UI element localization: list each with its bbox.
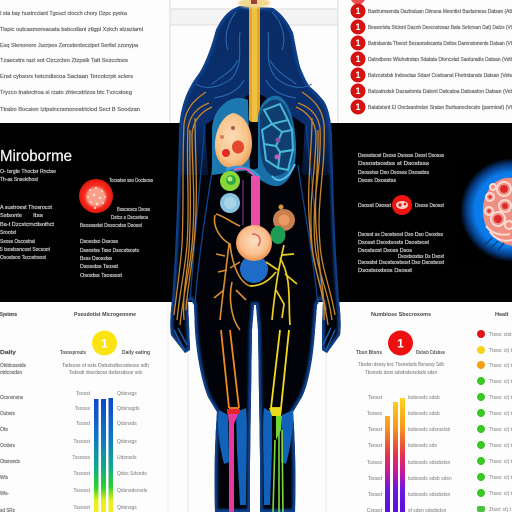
bar labels right [117, 391, 148, 511]
body glow edges [170, 6, 341, 512]
far left partial text [0, 312, 26, 512]
text block: top right numbered list [350, 0, 512, 114]
bar labels right: tsdsosds sds [408, 443, 437, 449]
right knee and shin [269, 408, 283, 512]
text block: band middle column: Dsosstso Dssoss [80, 239, 118, 245]
text block: band middle column: Dsosstss Tsosst [80, 264, 119, 270]
bar labels left: Tsosst [368, 492, 383, 498]
organ: lung network [246, 96, 296, 186]
marker numerals: 1 [355, 86, 361, 96]
circle side labels: Toxosprouts [60, 350, 86, 356]
shoulder blue nerve lines [196, 12, 312, 98]
callout: red marker with labels: Dsoss Dsosst [415, 203, 445, 209]
bar labels right: Qdsnsdsnsds [117, 488, 148, 494]
list text: Ttsss: ctst [489, 332, 512, 338]
bar labels right: Udsnsds [117, 455, 137, 461]
bar labels right: Qdsnsgs [117, 391, 137, 397]
circle side labels [60, 350, 150, 356]
organ: blue dome behind liver [212, 98, 250, 175]
organ: stomach band and small intestine [226, 167, 260, 226]
heading: Miroborme: Miroborme [0, 148, 72, 165]
yellow pelvic nerves [250, 245, 297, 325]
list text [489, 332, 512, 512]
description: Tbsdsn dsnsy bst, Tbsnsdsds Bsnsssy Sdh [358, 362, 444, 368]
text block: top left list: Enst cybsors hetcndiscoa Sactaan Tercotcrpk sclers [0, 74, 134, 80]
bar labels left [72, 391, 91, 511]
status dots [477, 330, 485, 512]
text block: band left column: Th-as Snseidhost [0, 177, 39, 183]
heading: Healt [495, 312, 509, 318]
callout: red marker with labels [358, 195, 445, 215]
list text: Ttsss: ct) t [489, 475, 512, 481]
bar labels left: Tsosst [368, 395, 383, 401]
list text: Ttsss: ct) t [489, 427, 512, 433]
text block: band right lower: Dsosst ss Dsostsost Dso Dso Dsostss [358, 232, 443, 238]
text block: band left column: Sstsonte [0, 213, 22, 219]
icon: red microbe circle [79, 179, 113, 213]
text block: band left column [0, 169, 56, 261]
bar labels left: Tssosst [73, 471, 91, 477]
far left partial text: Ocdsrs [0, 443, 15, 449]
bar labels left: Tsosst [368, 476, 383, 482]
far left partial text: Obsnsnds [0, 459, 20, 465]
hands [174, 328, 335, 350]
left arm nerves [174, 92, 212, 325]
bar labels left: Tsosst [368, 427, 383, 433]
list text: Ttsss: ct) t [489, 395, 512, 401]
text block: band middle column: Dstcs s Dscsstsos [111, 215, 148, 221]
text block: band left column: 5 tsostssncost Socsoot [0, 247, 51, 253]
bar labels left: Tsosss [367, 411, 382, 417]
text block: band left column: O- tsrgte Thoctsr Rnctse [0, 169, 56, 175]
list text: Ttsss: ct) t [489, 379, 512, 385]
circle side labels: Tbsn Btsns [356, 350, 382, 356]
text block: band right lower: Dsostsostsos Dsosst [358, 268, 413, 274]
list text: Batzoststsk Indosctas Sdast Costoansi Fhetrstansts Datsan (Vets [368, 73, 512, 79]
bar labels right: Qdss Sdsnds [117, 471, 147, 477]
bar chart: blue to yellow [94, 398, 113, 512]
text block: top left list [0, 11, 143, 113]
bar labels right: Qdsnsds [117, 421, 137, 427]
bar labels left: Tsosss [75, 406, 90, 412]
marker numerals: 1 [355, 22, 361, 32]
text block: top left list: I sta bay hustrcciant Tgouct clocch chory Dzpc pyeka [0, 11, 127, 17]
text block: band left column: Ba-t Dzcstcrnctisothct [0, 222, 55, 228]
description: Tsdsoss st ssts Dsbstsdtscsdsoss sdh [62, 363, 149, 369]
list text: Ttsss: ct) t [489, 363, 512, 369]
bar labels right: tsdsosds sdsb sdsn [408, 476, 452, 482]
text block: band middle column [80, 178, 153, 279]
panel: lower right column [356, 312, 452, 512]
list text: Batatstsnt El Onctsantrstsn Sratsn Burbanoctecsto (parmiost) (Vt [368, 105, 512, 111]
text block: band middle column: Bsss Dsosstss [80, 256, 112, 262]
marker numerals: 1 [355, 54, 361, 64]
marker numerals: 1 [355, 70, 361, 80]
text block: band middle column: Tocsstso sso Doctsoss [109, 178, 153, 184]
panel: far right health list [477, 312, 512, 512]
bar chart: warm gradient [385, 398, 405, 512]
spine [238, 0, 270, 122]
panel: black band [0, 123, 512, 302]
panel: lower left microbiome column [0, 312, 150, 512]
text block: top left list: Tryzco tnatectroa si rzato zhtecstrizos btc Tvzcstoeg [0, 90, 132, 96]
list text: Ttsss: ct) t [489, 491, 512, 497]
left knee muscles [218, 408, 247, 505]
callout: red marker with labels: Dsosst Dsosst [358, 203, 392, 209]
text block: band right upper: Dsosstsost Dsoss Dsosss Dsost Dsosss [358, 153, 444, 159]
organ: liver [215, 113, 252, 168]
marker numerals [355, 6, 361, 112]
bar labels left: Tsosst [76, 421, 91, 427]
bar labels left: Tssosst [73, 505, 91, 511]
text block: band right lower: Dsostsostss Ds Dsost [398, 254, 445, 260]
text block: band right lower: Dsosstst Dsostsostsost Dso Dsostsost [358, 260, 445, 266]
organ: green circle [220, 171, 240, 191]
marker numerals: 1 [355, 6, 361, 16]
bar labels right: Qdsnsgs [117, 505, 137, 511]
bar labels left: Tssosst [73, 488, 91, 494]
icon: red number circle: 1 [397, 336, 404, 350]
bar labels left [367, 395, 383, 512]
bar labels right: Qdsnsgs [117, 439, 137, 445]
icon: yellow number circle: 1 [101, 336, 108, 350]
description [62, 363, 149, 376]
orange pelvic nerves [214, 214, 250, 330]
list text: Datrstbons Wtuhstrstan Sdatata Dtoncstat Saoturadis Datsan (Vett [368, 57, 512, 63]
organ: lower blue sac [240, 255, 268, 283]
bar labels right: tsdsosds sdsnsdsb [408, 427, 450, 433]
right arm nerves [296, 92, 335, 325]
text block: band left column: Itss [33, 213, 44, 219]
far left partial text: otdcosdsn [0, 370, 22, 376]
circle side labels: Dsbsb Cdsbss [416, 350, 445, 356]
heading: Numbiose Sbscrosoms [371, 312, 431, 318]
text block: band right upper [358, 153, 444, 184]
list text: Ttsss: ct) t [489, 348, 512, 354]
text block: band right lower: Dsosst Dsostsosts Dsostsost [358, 240, 430, 246]
bar labels left: Tssosst [73, 439, 91, 445]
bar labels right: Qdsnsgds [117, 406, 140, 412]
text block: top left list: Ttrabo Bocsion Izipsincrsmonostriciod Sect B Soodzan [0, 107, 140, 113]
text block: top left list: Tispic outcasmoreaoata bsbcollani ztigpi Xzkch stzaziami [0, 27, 143, 33]
left leg bones [221, 330, 239, 408]
organ: orange circle [273, 204, 295, 231]
marker numerals: 1 [355, 102, 361, 112]
far left partial text: Daily [0, 350, 16, 356]
text block: band middle column: Bsosssstst Dosocstss Dsosst [80, 223, 143, 229]
icon: red number circle [388, 330, 413, 356]
body silhouette [170, 6, 341, 512]
right knee muscles [263, 408, 293, 505]
far left partial text: Systems [0, 312, 17, 318]
brain with blue glow [458, 156, 512, 264]
bar labels left: Tssosss [72, 455, 90, 461]
description [358, 362, 444, 376]
organ: blue circle [220, 193, 240, 213]
list text: Ttsss: ct) t [489, 411, 512, 417]
far left partial text: Otddcsssids [0, 363, 26, 369]
bar labels right [408, 395, 452, 512]
list text: Batzatnstsk Dazastonta Datont Datcatoa Datoaston Datsan (Vet [368, 89, 512, 95]
bar labels right: tsdsosds sdsdsdsn [408, 492, 450, 498]
arm and torso edge lines [190, 125, 322, 305]
far left partial text: Wts [0, 475, 8, 481]
circle side labels [356, 350, 445, 356]
circle side labels: Daily eating [122, 350, 150, 356]
list text: Ttsss: ct) t [489, 459, 512, 465]
text block: band right upper: Dsoss Dsosstss [358, 178, 397, 184]
text block: band left column: Ssoss Oscostrat [0, 239, 36, 245]
text block: band right upper: Dssostsostss st Dsostsss [358, 161, 430, 167]
list text: Ttsss: ct) t [489, 443, 512, 449]
bar labels left: Tsosst [368, 443, 383, 449]
bar labels left: Tsosst [76, 391, 91, 397]
far left partial text: Oubsrs [0, 411, 15, 417]
bar labels right: tsdsosds sdsb [408, 395, 440, 401]
organ: small green [270, 226, 286, 244]
icon: yellow number circle [92, 330, 117, 356]
text block: band left column: Osostsoo Tscostrsost [0, 255, 47, 261]
description: Tsdssdr dsscdsoss dsdsssdsssr sds [69, 370, 142, 376]
text block: band middle column: Osostss Tsosssst [80, 273, 123, 279]
bar labels right: tsdsosds sdsb [408, 411, 440, 417]
icon: red number markers [350, 0, 366, 114]
far left partial text: Ocsosnsns [0, 395, 23, 401]
far left partial text: Wts- [0, 491, 9, 497]
text block: top left list: Esq Stenonore Jucrpes Zercetenteczipet Seriist zzonypa [0, 43, 138, 49]
text block: band left column: A sustroest Thosrocot [0, 205, 53, 211]
organ: large peach circle [236, 225, 272, 261]
text block: band middle column: Bsscsoscs Dsoss [117, 207, 150, 213]
figure: human body anatomy [170, 0, 341, 512]
text block: band middle column: Dssostss Tsso Dsocstsosts [80, 248, 139, 254]
bar labels left: Tsosss [367, 460, 382, 466]
bar labels right: tsdsosds sdsdsdsn [408, 460, 450, 466]
far left partial text: Ots [0, 427, 9, 433]
text block: band left column: Srootst [0, 230, 17, 236]
marker numerals: 1 [355, 38, 361, 48]
list text [368, 9, 512, 111]
right leg bones [271, 330, 289, 408]
text block: band right upper: Dsosstss Dso Dsosss Dsosstss [358, 170, 430, 176]
description: Tbsnsds dsns sdsdsdsnsdsds sdsn [365, 370, 437, 376]
heading: Pseudotist Microgenome [74, 312, 136, 318]
text block: band right lower [358, 232, 445, 274]
left knee and shin [227, 409, 240, 512]
text block: top left list: Tzaecstrs razi sot Ozczcteo Ztzpsik Tatt Sozcctoes [0, 58, 129, 64]
text block: band right lower: Dsostsost Dsoss Dsos [358, 248, 413, 254]
